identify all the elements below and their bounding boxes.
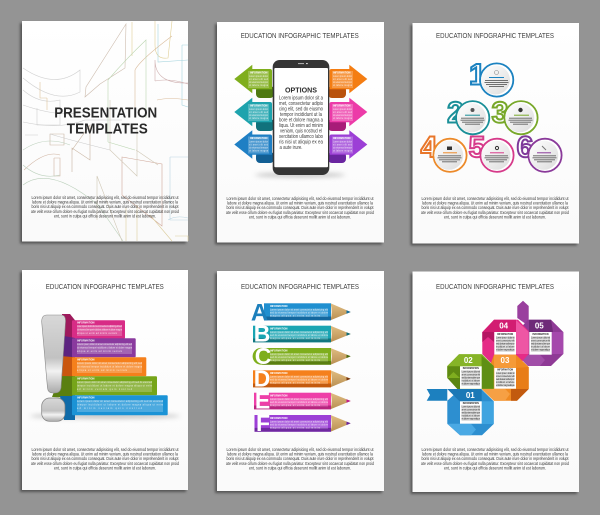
pencil F: sed do eiusmod tempor incididunt ut labore et dolore bbox=[270, 423, 329, 426]
pencil B bbox=[253, 320, 351, 346]
circle 5: 5 bbox=[469, 131, 485, 164]
pencil B: INFORMATION bbox=[270, 328, 288, 330]
pencil C: sed do eiusmod tempor incididunt ut labore et dolore bbox=[270, 356, 329, 359]
ribbon 01: amet consectetur elit bbox=[462, 408, 480, 412]
circle 3 bbox=[492, 96, 538, 134]
cover body text: labore et dolore magna aliqua. Ut enim ad minim veniam, quis nostrud exercitation ullamco la bbox=[32, 200, 179, 205]
body text: Lorem ipsum dolor sit amet, consectetur adipisicing elit, sed do eiusmod tempor incididunt ut bbox=[422, 447, 569, 452]
ribbon 05: sed do eiusmod tempor bbox=[531, 342, 550, 346]
arrow: blue: ut labore magna bbox=[249, 150, 269, 152]
ribbon 05: 05 bbox=[535, 322, 544, 330]
arrow: blue: do eiusmod tempor bbox=[249, 146, 268, 150]
step: orange: do eiusmod tempor incididunt ut labore et dolore magna bbox=[77, 366, 143, 368]
ribbon 02: incididunt ut labore bbox=[462, 380, 481, 382]
cover heading: TEMPLATES bbox=[67, 122, 148, 138]
step: pink: INFORMATION bbox=[77, 322, 95, 324]
exclamation mark bbox=[42, 315, 66, 421]
arrow: blue: sit amet elit sed bbox=[249, 144, 269, 146]
body text: Lorem ipsum dolor sit amet, consectetur adipisicing elit, sed do eiusmod tempor incididunt ut bbox=[226, 447, 374, 452]
pencil D: INFORMATION bbox=[270, 372, 288, 375]
pencil C: Lorem ipsum dolor sit amet consectetur adipisicing elit bbox=[270, 353, 328, 356]
body text: ent, sunt in culpa qui officia deserunt mollit anim id est laborum. bbox=[249, 465, 351, 470]
phone: veniam, quis nostrud el bbox=[280, 128, 322, 134]
ribbon 01: et dolore magna aliqua bbox=[462, 418, 481, 420]
pencil A: A bbox=[251, 299, 268, 326]
body text: ate velit esse cillum dolore eu fugiat nulla pariatur. Excepteur sint occaecat cupidatat non proid bbox=[421, 461, 570, 466]
arrow: teal bbox=[234, 98, 274, 131]
body text bbox=[31, 447, 180, 470]
cover body text: boris nisi ut aliquip ex ea commodo consequat. Duis aute irure dolor in reprehenderit in volupt bbox=[32, 204, 179, 209]
ribbon 03: et dolore magna aliqua bbox=[496, 384, 515, 387]
circle 6 bbox=[517, 131, 562, 172]
cover heading bbox=[54, 106, 157, 138]
step: blue: Lorem ipsum dolor sit amet consectetur adipisicing elit sed do eiusmod bbox=[77, 400, 164, 403]
arrow: orange: sit amet elit sed bbox=[333, 78, 353, 81]
body text: ent, sunt in culpa qui officia deserunt mollit anim id est laborum. bbox=[444, 214, 546, 219]
arrow: blue: INFORMATION bbox=[250, 137, 268, 140]
step: blue: tempor incididunt ut labore et dolore magna aliqua ut enim bbox=[77, 404, 163, 406]
pencil D: Lorem ipsum dolor sit amet consectetur adipisicing elit bbox=[270, 376, 328, 378]
phone: met, consectetur adipis bbox=[279, 101, 323, 107]
arrow: pink bbox=[328, 98, 367, 131]
circle 2: 2 bbox=[447, 96, 464, 130]
pencil E: Lorem ipsum dolor sit amet consectetur adipisicing elit bbox=[270, 398, 328, 401]
pencil D: magna aliqua ut enim ad minim bbox=[270, 382, 320, 384]
phone: cing elit, sed do eiusmo bbox=[279, 106, 323, 112]
panel: ribbon octagons bbox=[410, 272, 579, 494]
arrow: pink: do eiusmod tempor bbox=[333, 114, 352, 117]
arrow: blue bbox=[234, 130, 274, 163]
body text: boris nisi ut aliquip ex ea commodo consequat. Duis aute irure dolor in reprehenderit in volupt bbox=[32, 456, 179, 461]
ribbon 02: 02 bbox=[464, 356, 473, 365]
circle 5 bbox=[469, 131, 514, 172]
arrow: orange: Lorem ipsum dolor bbox=[333, 75, 352, 78]
arrow: pink: ut labore magna bbox=[333, 117, 353, 120]
ribbon 05: Lorem ipsum dolor sit bbox=[531, 336, 550, 340]
pencil E: magna aliqua ut enim ad minim bbox=[270, 404, 320, 407]
arrow: green: Lorem ipsum dolor bbox=[249, 75, 268, 78]
circle 1: 1 bbox=[469, 58, 486, 92]
ribbon 03: sed do eiusmod tempor bbox=[496, 378, 515, 381]
arrow: teal: INFORMATION bbox=[250, 104, 268, 108]
arrow: green: sit amet elit sed bbox=[249, 78, 269, 81]
body text: ate velit esse cillum dolore eu fugiat nulla pariatur. Excepteur sint occaecat cupidatat non proid bbox=[226, 461, 375, 466]
ribbon 03: INFORMATION bbox=[497, 368, 514, 372]
body text: ate velit esse cillum dolore eu fugiat nulla pariatur. Excepteur sint occaecat cupidatat non proid bbox=[31, 461, 180, 466]
arrow: pink: sit amet elit sed bbox=[333, 111, 353, 114]
pencil F: magna aliqua ut enim ad minim bbox=[270, 426, 320, 429]
body text: Lorem ipsum dolor sit amet, consectetur adipisicing elit, sed do eiusmod tempor incididunt ut bbox=[226, 196, 374, 201]
pencil A bbox=[251, 299, 351, 326]
pencil E: E bbox=[255, 388, 270, 414]
arrow: blue: Lorem ipsum dolor bbox=[249, 140, 268, 144]
step: purple: aliqua ut enim ad minim veniam bbox=[77, 350, 122, 353]
cover line art bbox=[23, 21, 188, 241]
step: blue bbox=[60, 395, 168, 420]
ribbon 01: sed do eiusmod tempor bbox=[462, 412, 480, 414]
circle 4 bbox=[421, 131, 467, 172]
ribbon 04: et dolore magna aliqua bbox=[496, 348, 515, 352]
body text: ent, sunt in culpa qui officia deserunt mollit anim id est laborum. bbox=[444, 465, 546, 470]
circle 3: 3 bbox=[492, 96, 508, 130]
body text: boris nisi ut aliquip ex ea commodo consequat. Duis aute irure dolor in reprehenderit in volupt bbox=[422, 456, 569, 461]
arrow: orange: do eiusmod tempor bbox=[333, 81, 352, 84]
step: orange bbox=[58, 356, 146, 378]
pencil C: C bbox=[255, 343, 271, 369]
panel: pencils A-F bbox=[215, 271, 384, 493]
panel: exclamation stair bbox=[20, 270, 188, 492]
cover body text: ate velit esse cillum dolore eu fugiat nulla pariatur. Excepteur sint occaecat cupidatat non proid bbox=[31, 209, 180, 214]
ribbon 05: amet consectetur elit bbox=[531, 340, 550, 342]
panel: presentation templates cover bbox=[20, 21, 188, 244]
step: purple bbox=[62, 336, 136, 359]
heading: EDUCATION INFOGRAPHIC TEMPLATES bbox=[436, 282, 554, 291]
body text bbox=[421, 196, 570, 219]
pencil F: INFORMATION bbox=[270, 417, 288, 420]
arrow: green: ut labore magna bbox=[249, 84, 269, 87]
pencil F bbox=[254, 410, 351, 436]
body text: ent, sunt in culpa qui officia deserunt mollit anim id est laborum. bbox=[54, 465, 156, 470]
ribbon 01: incididunt ut labore bbox=[462, 414, 481, 418]
ribbon 04: sed do eiusmod tempor bbox=[496, 342, 515, 346]
ribbon 03 bbox=[482, 355, 529, 401]
step: purple: do eiusmod tempor incididunt ut labore et dolore magna bbox=[77, 346, 133, 350]
body text: boris nisi ut aliquip ex ea commodo consequat. Duis aute irure dolor in reprehenderit in volupt bbox=[226, 205, 374, 210]
pencil F: Lorem ipsum dolor sit amet consectetur adipisicing elit bbox=[270, 420, 328, 423]
ribbon 02: sed do eiusmod tempor bbox=[462, 376, 480, 380]
phone bbox=[273, 60, 329, 175]
pencil B: Lorem ipsum dolor sit amet consectetur adipisicing elit bbox=[270, 331, 328, 334]
phone: Lorem ipsum dolor sit a bbox=[279, 96, 323, 102]
body text: ate velit esse cillum dolore eu fugiat nulla pariatur. Excepteur sint occaecat cupidatat non proid bbox=[421, 210, 570, 215]
step: orange: INFORMATION bbox=[77, 358, 95, 362]
pencil E: INFORMATION bbox=[270, 394, 288, 398]
body text: Lorem ipsum dolor sit amet, consectetur adipisicing elit, sed do eiusmod tempor incididunt ut bbox=[422, 196, 569, 201]
heading: EDUCATION INFOGRAPHIC TEMPLATES bbox=[436, 31, 554, 40]
ribbon 02 bbox=[447, 354, 494, 390]
body text: Lorem ipsum dolor sit amet, consectetur adipisicing elit, sed do eiusmod tempor incididunt ut bbox=[32, 447, 179, 452]
arrow: purple: INFORMATION bbox=[333, 137, 351, 140]
panel: phone arrows options bbox=[215, 22, 384, 244]
ribbon 03: 03 bbox=[501, 356, 510, 365]
ribbon 02: INFORMATION bbox=[463, 367, 479, 370]
arrow: purple: do eiusmod tempor bbox=[333, 146, 352, 150]
body text: labore et dolore magna aliqua. Ut enim ad minim veniam, quis nostrud exercitation ullamco la bbox=[227, 201, 374, 206]
phone: tempor incididunt ut la bbox=[280, 112, 322, 118]
body text: labore et dolore magna aliqua. Ut enim ad minim veniam, quis nostrud exercitation ullamco la bbox=[32, 452, 179, 457]
step: pink bbox=[62, 314, 125, 340]
phone ground shadow bbox=[255, 172, 345, 178]
ribbon 04: incididunt ut labore bbox=[496, 346, 515, 348]
arrow: orange: INFORMATION bbox=[333, 72, 351, 74]
phone: OPTIONS bbox=[285, 86, 317, 94]
body text: labore et dolore magna aliqua. Ut enim ad minim veniam, quis nostrud exercitation ullamco la bbox=[422, 201, 569, 206]
pencil B: sed do eiusmod tempor incididunt ut labore et dolore bbox=[270, 334, 329, 337]
ribbon 05: INFORMATION bbox=[532, 333, 549, 336]
pencil C: magna aliqua ut enim ad minim bbox=[270, 359, 320, 362]
body text bbox=[421, 447, 570, 470]
phone: liqua. Ut enim ad minim bbox=[279, 123, 323, 129]
pencil D: sed do eiusmod tempor incididunt ut labore et dolore bbox=[270, 378, 329, 382]
pencil B: magna aliqua ut enim ad minim bbox=[270, 337, 320, 340]
ribbon 01: Lorem ipsum dolor sit bbox=[462, 406, 480, 408]
body text: ent, sunt in culpa qui officia deserunt mollit anim id est laborum. bbox=[249, 214, 351, 219]
pencil E: sed do eiusmod tempor incididunt ut labore et dolore bbox=[270, 401, 329, 404]
ribbon 04 bbox=[482, 320, 529, 366]
step: purple: Lorem ipsum dolor sit amet consectetur adipisicing elit sed bbox=[77, 343, 133, 346]
phone: ris nisi ut aliquip ex ea bbox=[279, 140, 323, 146]
step: green bbox=[52, 376, 157, 398]
pencil A: sed do eiusmod tempor incididunt ut labore et dolore bbox=[270, 312, 329, 314]
heading: EDUCATION INFOGRAPHIC TEMPLATES bbox=[241, 282, 359, 291]
ribbon 02: amet consectetur elit bbox=[462, 374, 480, 376]
circle 4: 4 bbox=[421, 131, 438, 164]
pencil D bbox=[253, 366, 351, 392]
arrow: pink: Lorem ipsum dolor bbox=[333, 108, 352, 111]
ribbon 03: amet consectetur elit bbox=[496, 375, 515, 378]
phone: bore et dolore magna a bbox=[279, 118, 323, 124]
arrow: purple: ut labore magna bbox=[333, 150, 353, 152]
step: green: ad minim veniam quis nostrud bbox=[77, 388, 133, 391]
arrow: orange: ut labore magna bbox=[333, 84, 353, 87]
step: purple: INFORMATION bbox=[77, 340, 95, 342]
ribbon 05: incididunt ut labore bbox=[531, 346, 551, 348]
step: pink: do eiusmod tempor incididunt ut labore et dolore magna bbox=[77, 328, 123, 332]
step: green: INFORMATION bbox=[77, 378, 95, 380]
circle 1 bbox=[469, 58, 513, 97]
ribbon 05 bbox=[517, 301, 563, 366]
pencil F: F bbox=[256, 410, 270, 436]
pencil C: INFORMATION bbox=[270, 350, 288, 352]
ribbon 01: 01 bbox=[466, 391, 475, 400]
ribbon 01 bbox=[427, 389, 494, 435]
panel: numbered circles bbox=[410, 23, 579, 246]
arrow: purple: sit amet elit sed bbox=[333, 144, 353, 146]
arrow: teal: sit amet elit sed bbox=[249, 111, 269, 114]
arrow: teal: do eiusmod tempor bbox=[249, 114, 268, 117]
circle 6: 6 bbox=[517, 131, 533, 164]
pencil B: B bbox=[254, 320, 270, 346]
cover heading: PRESENTATION bbox=[54, 106, 157, 122]
cover body text: Lorem ipsum dolor sit amet, consectetur adipisicing elit, sed do eiusmod tempor incididunt ut bbox=[32, 195, 179, 200]
circle 2 bbox=[447, 96, 489, 134]
arrow: purple bbox=[328, 130, 367, 163]
arrow: purple: Lorem ipsum dolor bbox=[333, 140, 352, 144]
body text: ate velit esse cillum dolore eu fugiat nulla pariatur. Excepteur sint occaecat cupidatat non proid bbox=[226, 210, 375, 215]
ribbon 04: Lorem ipsum dolor sit bbox=[496, 336, 515, 340]
pencil D: D bbox=[254, 366, 270, 392]
cover body text bbox=[31, 195, 180, 218]
ribbon 02: et dolore magna aliqua bbox=[462, 382, 481, 386]
step: green: tempor incididunt ut labore et dolore magna aliqua ut enim bbox=[77, 384, 152, 388]
pencil E bbox=[254, 388, 351, 414]
body text: boris nisi ut aliquip ex ea commodo consequat. Duis aute irure dolor in reprehenderit in volupt bbox=[226, 456, 374, 461]
body text bbox=[226, 196, 375, 219]
phone: a aute irure. bbox=[280, 145, 302, 151]
arrow: green: do eiusmod tempor bbox=[249, 81, 268, 84]
step: orange: Lorem ipsum dolor sit amet consectetur adipisicing elit sed bbox=[77, 362, 143, 365]
pencil A: Lorem ipsum dolor sit amet consectetur adipisicing elit bbox=[270, 308, 328, 312]
arrow: orange bbox=[328, 65, 367, 98]
step: blue: INFORMATION bbox=[77, 396, 95, 400]
body text: labore et dolore magna aliqua. Ut enim ad minim veniam, quis nostrud exercitation ullamco la bbox=[227, 452, 374, 457]
phone: xercitation ullamco labo bbox=[279, 134, 323, 140]
arrow: green: INFORMATION bbox=[250, 72, 268, 74]
ribbon 01: INFORMATION bbox=[463, 402, 479, 405]
step: orange: aliqua ut enim ad minim veniam bbox=[77, 369, 127, 372]
step: green: Lorem ipsum dolor sit amet consectetur adipisicing elit sed do eiusmod bbox=[77, 381, 153, 384]
body text: boris nisi ut aliquip ex ea commodo consequat. Duis aute irure dolor in reprehenderit in volupt bbox=[422, 205, 569, 210]
step: pink: Lorem ipsum dolor sit amet consectetur adipisicing elit sed bbox=[77, 325, 123, 328]
step: blue: ad minim veniam quis nostrud bbox=[77, 407, 143, 410]
arrow: teal: ut labore magna bbox=[249, 117, 269, 120]
pencil A: INFORMATION bbox=[270, 305, 288, 308]
body text bbox=[226, 447, 375, 470]
ribbon 03: Lorem ipsum dolor sit bbox=[496, 372, 515, 375]
ribbon 05: et dolore magna aliqua bbox=[531, 348, 551, 352]
body text: labore et dolore magna aliqua. Ut enim ad minim veniam, quis nostrud exercitation ullamco la bbox=[422, 452, 569, 457]
step: pink: aliqua ut enim ad minim veniam bbox=[77, 332, 117, 335]
pencil A: magna aliqua ut enim ad minim bbox=[270, 314, 320, 318]
ground shadow bbox=[30, 414, 180, 418]
ribbon 04: INFORMATION bbox=[497, 333, 514, 336]
ribbon 04: 04 bbox=[499, 322, 509, 330]
ribbon 04: amet consectetur elit bbox=[496, 340, 515, 342]
arrow: teal: Lorem ipsum dolor bbox=[249, 108, 268, 111]
ribbon 02: Lorem ipsum dolor sit bbox=[462, 370, 480, 374]
ribbon 03: incididunt ut labore bbox=[496, 381, 515, 384]
arrow: green bbox=[234, 65, 274, 98]
heading: EDUCATION INFOGRAPHIC TEMPLATES bbox=[241, 31, 359, 40]
pencil C bbox=[253, 343, 351, 369]
arrow: pink: INFORMATION bbox=[333, 104, 351, 108]
cover body text: ent, sunt in culpa qui officia deserunt mollit anim id est laborum. bbox=[54, 213, 156, 218]
heading: EDUCATION INFOGRAPHIC TEMPLATES bbox=[46, 282, 164, 291]
